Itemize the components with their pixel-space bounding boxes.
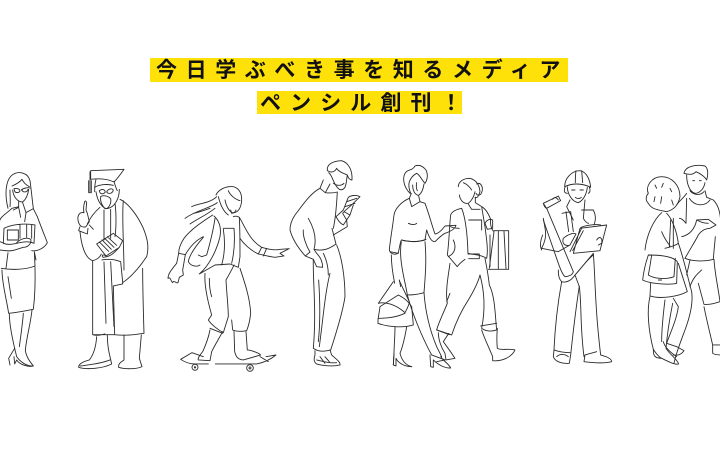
title line 1: 今日学ぶべき事を知るメディア bbox=[156, 59, 569, 82]
figure: professor in graduation gown bbox=[78, 169, 148, 369]
figure: worker with hard hat and plans bbox=[541, 171, 612, 363]
title line 2: ペンシル創刊！ bbox=[260, 92, 471, 115]
figure: woman with handbag bbox=[378, 165, 456, 368]
figure: girl on skateboard bbox=[168, 187, 289, 371]
figure: woman with shopping bag bbox=[437, 178, 515, 361]
figure: man looking at phone bbox=[290, 161, 360, 366]
figure: woman with glasses holding books bbox=[0, 173, 47, 366]
figure: couple talking bbox=[643, 165, 720, 364]
